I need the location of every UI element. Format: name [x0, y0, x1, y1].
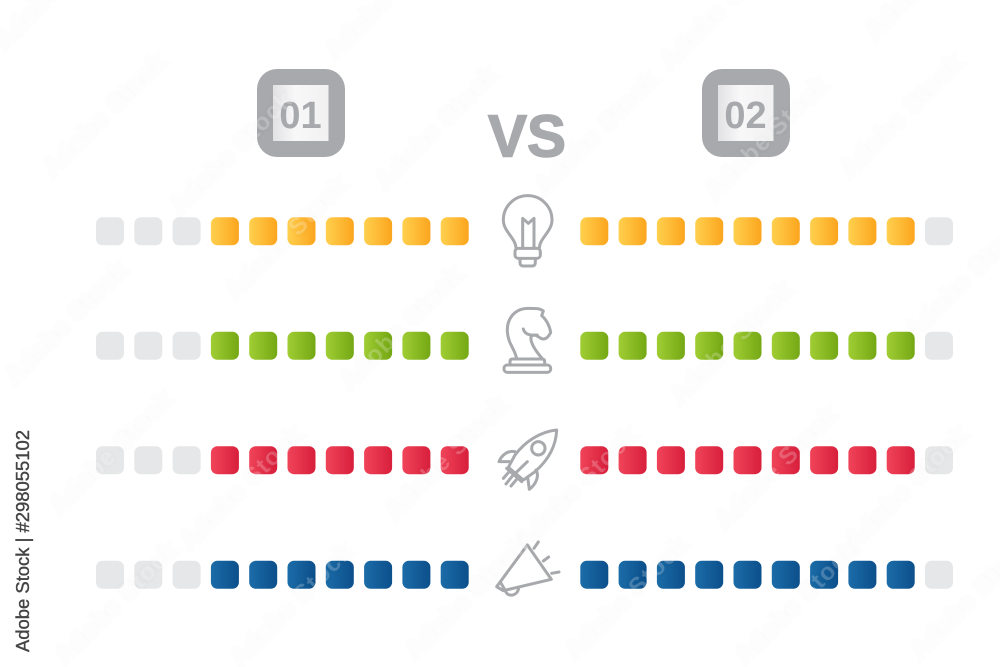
watermark pattern: Adobe Stock [665, 277, 798, 409]
left bar: 7 of 10 [96, 561, 469, 589]
icon: megaphone [497, 542, 559, 595]
row 4: blue scores [96, 542, 953, 595]
badge 02: 02 [724, 95, 767, 137]
watermark pattern: Adobe Stock [38, 49, 171, 181]
watermark pattern: Adobe Stock [700, 72, 833, 204]
watermark pattern: Adobe Stock [530, 67, 663, 199]
watermark pattern: Adobe Stock [165, 87, 298, 219]
watermark pattern: Adobe Stock [370, 62, 503, 194]
right bar: 9 of 10 [580, 217, 953, 245]
left bar: 7 of 10 [96, 217, 469, 245]
heading: VS: VS [488, 104, 566, 170]
icon: rocket [499, 430, 557, 489]
watermark pattern: Adobe Stock [840, 422, 973, 554]
left bar: 7 of 10 [96, 446, 469, 474]
row 1: yellow scores [96, 196, 953, 266]
icon: chess knight [504, 308, 551, 372]
right bar: 9 of 10 [580, 561, 953, 589]
watermark pattern: Adobe Stock [45, 387, 178, 519]
watermark pattern: Adobe Stock [175, 422, 308, 554]
badge 01: 01 [279, 95, 322, 137]
watermark pattern: Adobe Stock [0, 257, 133, 389]
watermark pattern: Adobe Stock [380, 392, 513, 524]
watermark pattern: Adobe Stock [50, 537, 183, 667]
right bar: 9 of 10 [580, 332, 953, 360]
watermark pattern: Adobe Stock [835, 50, 968, 182]
watermark pattern: Adobe Stock [510, 422, 643, 554]
credit text: Adobe Stock | #298055102 [13, 430, 33, 652]
row 3: red scores [96, 430, 953, 489]
right bar: 9 of 10 [580, 446, 953, 474]
left bar: 7 of 10 [96, 332, 469, 360]
watermark pattern: Adobe Stock [730, 537, 863, 667]
row 2: green scores [96, 308, 953, 372]
watermark pattern: Adobe Stock [220, 172, 353, 304]
badge 02 [702, 69, 790, 157]
badge 01 [257, 69, 345, 157]
icon: light bulb [503, 196, 552, 266]
watermark pattern: Adobe Stock [710, 402, 843, 534]
watermark pattern: Adobe Stock [400, 532, 533, 664]
watermark pattern: Adobe Stock [560, 532, 693, 664]
watermark pattern: Adobe Stock [335, 262, 468, 394]
